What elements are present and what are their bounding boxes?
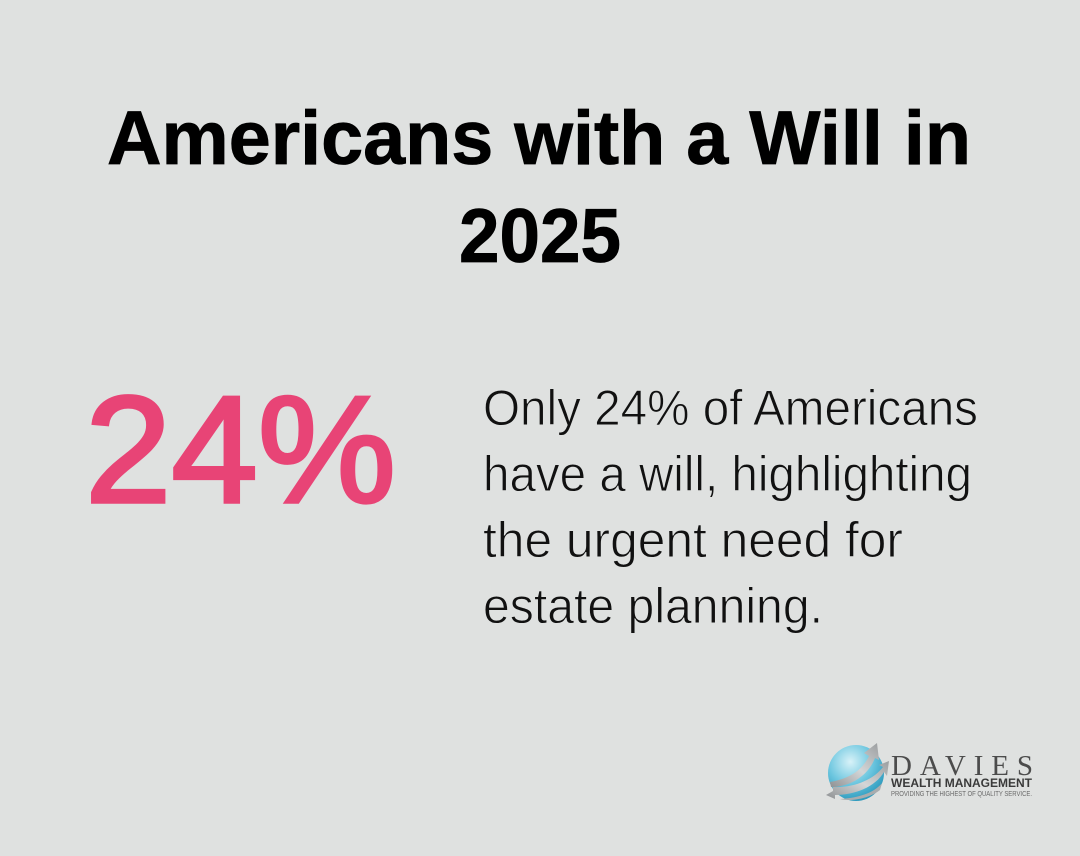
logo: Davies Wealth Management	[826, 743, 1033, 801]
wordmark: DAVIES	[891, 750, 1033, 782]
logo: Davies Wealth Management: WEALTH MANAGEMENT	[891, 776, 1033, 790]
description text: Only 24% of Americans	[483, 380, 978, 436]
title: Americans with a Will in	[107, 96, 971, 181]
icon: globe with arrows	[826, 743, 889, 801]
title	[107, 96, 971, 279]
title: 2025	[459, 194, 621, 279]
description text: estate planning.	[483, 578, 823, 634]
description text: the urgent need for	[483, 512, 903, 568]
big statistic: 24%: 24%	[85, 365, 396, 535]
logo: Davies Wealth Management: PROVIDING THE HIGHEST OF QUALITY SERVICE.	[891, 791, 1032, 798]
description text: have a will, highlighting	[483, 446, 972, 502]
description text	[483, 380, 978, 634]
